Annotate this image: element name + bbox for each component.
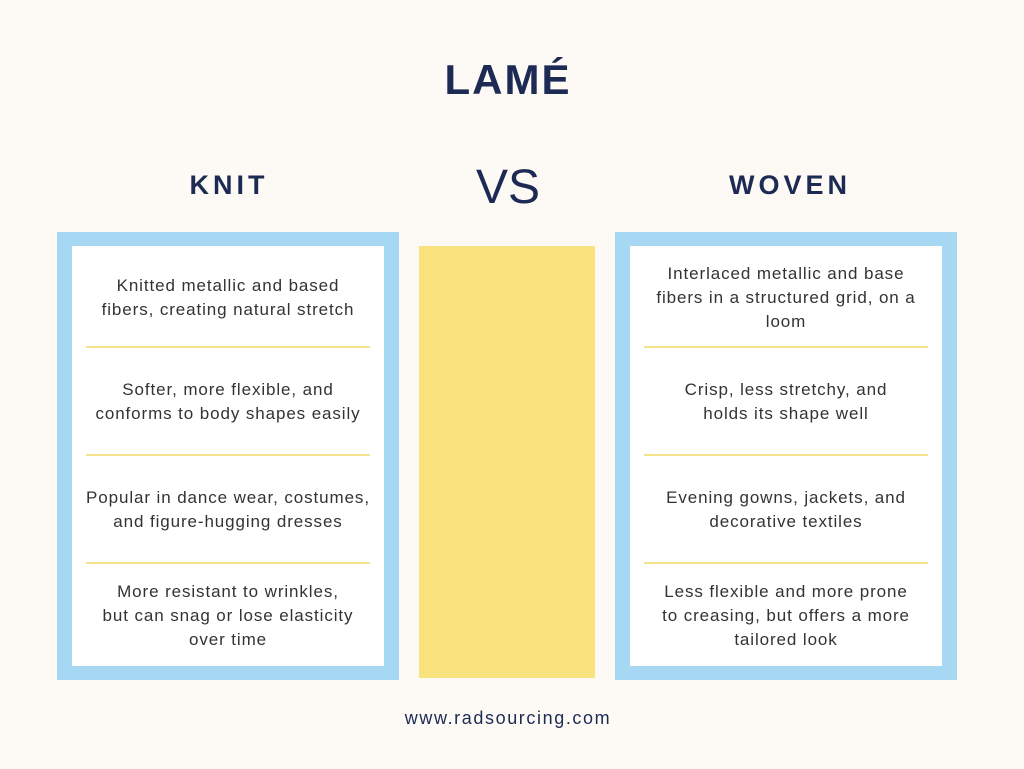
woven item 2: Crisp, less stretchy, and [685, 380, 887, 399]
woven item 4 [662, 582, 910, 649]
woven item 3 [666, 488, 906, 531]
woven item 3: decorative textiles [709, 512, 863, 531]
woven item 1 [656, 264, 916, 331]
woven item 2 [685, 380, 887, 423]
center yellow bar [419, 246, 595, 678]
knit item 1: Knitted metallic and based [117, 276, 339, 295]
panel: woven [615, 232, 957, 680]
panel: knit [57, 232, 399, 680]
heading: woven: WOVEN [729, 170, 851, 200]
woven item 1: Interlaced metallic and base [668, 264, 904, 283]
knit item 4: over time [189, 630, 267, 649]
knit item 2: Softer, more flexible, and [122, 380, 334, 399]
woven item 2: holds its shape well [703, 404, 869, 423]
knit item 4 [103, 582, 353, 649]
woven item 3: Evening gowns, jackets, and [666, 488, 906, 507]
footer url: www.radsourcing.com [405, 708, 611, 728]
knit item 2: conforms to body shapes easily [95, 404, 361, 423]
knit item 3: and figure-hugging dresses [113, 512, 343, 531]
woven item 4: to creasing, but offers a more [662, 606, 910, 625]
woven item 1: fibers in a structured grid, on a [656, 288, 916, 307]
knit item 3 [86, 488, 370, 531]
knit item 1 [102, 276, 354, 319]
knit item 3: Popular in dance wear, costumes, [86, 488, 370, 507]
heading: knit: KNIT [190, 170, 268, 200]
knit item 4: but can snag or lose elasticity [103, 606, 353, 625]
knit item 1: fibers, creating natural stretch [102, 300, 354, 319]
knit item 4: More resistant to wrinkles, [117, 582, 339, 601]
heading: vs: VS [476, 161, 540, 214]
title: LAMÉ [444, 56, 572, 103]
woven item 4: Less flexible and more prone [664, 582, 908, 601]
woven item 4: tailored look [734, 630, 838, 649]
woven item 1: loom [766, 312, 806, 331]
knit item 2 [95, 380, 361, 423]
